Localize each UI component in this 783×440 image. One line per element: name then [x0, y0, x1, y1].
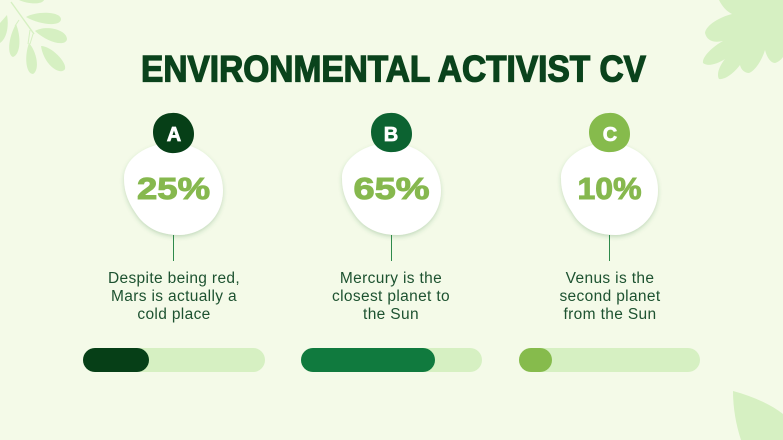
letter A: A [167, 124, 181, 146]
value 65%: 65% [354, 171, 430, 206]
value 25%: 25% [137, 171, 210, 206]
value 10%: 10% [578, 171, 642, 206]
description A: Despite being red, [108, 270, 240, 287]
decorative leaf branch top left [0, 0, 67, 74]
description C: from the Sun [564, 306, 656, 323]
column C [519, 113, 700, 372]
connector line B [391, 235, 392, 261]
letter C: C [603, 124, 617, 146]
blob C [561, 143, 658, 235]
progress bar A [83, 348, 265, 372]
title: ENVIRONMENTAL ACTIVIST CV [141, 48, 646, 90]
decorative leaf bottom right [733, 391, 783, 440]
blob B [342, 143, 441, 235]
progress bar B [301, 348, 482, 372]
blob A [124, 143, 223, 235]
description A: Mars is actually a [111, 288, 237, 305]
badge B [371, 113, 412, 152]
decorative leaf top right [703, 0, 783, 79]
progress bar C [519, 348, 700, 372]
connector line C [609, 235, 610, 261]
badge A [153, 113, 194, 153]
column B [301, 113, 482, 372]
column A [83, 113, 265, 372]
connector line A [173, 235, 174, 261]
description C: second planet [559, 288, 661, 305]
badge C [589, 113, 630, 152]
description C: Venus is the [566, 270, 654, 287]
letter B: B [384, 124, 398, 146]
description A: cold place [137, 306, 211, 323]
description B: closest planet to [332, 288, 450, 305]
description B: Mercury is the [340, 270, 442, 287]
description B: the Sun [363, 306, 419, 323]
